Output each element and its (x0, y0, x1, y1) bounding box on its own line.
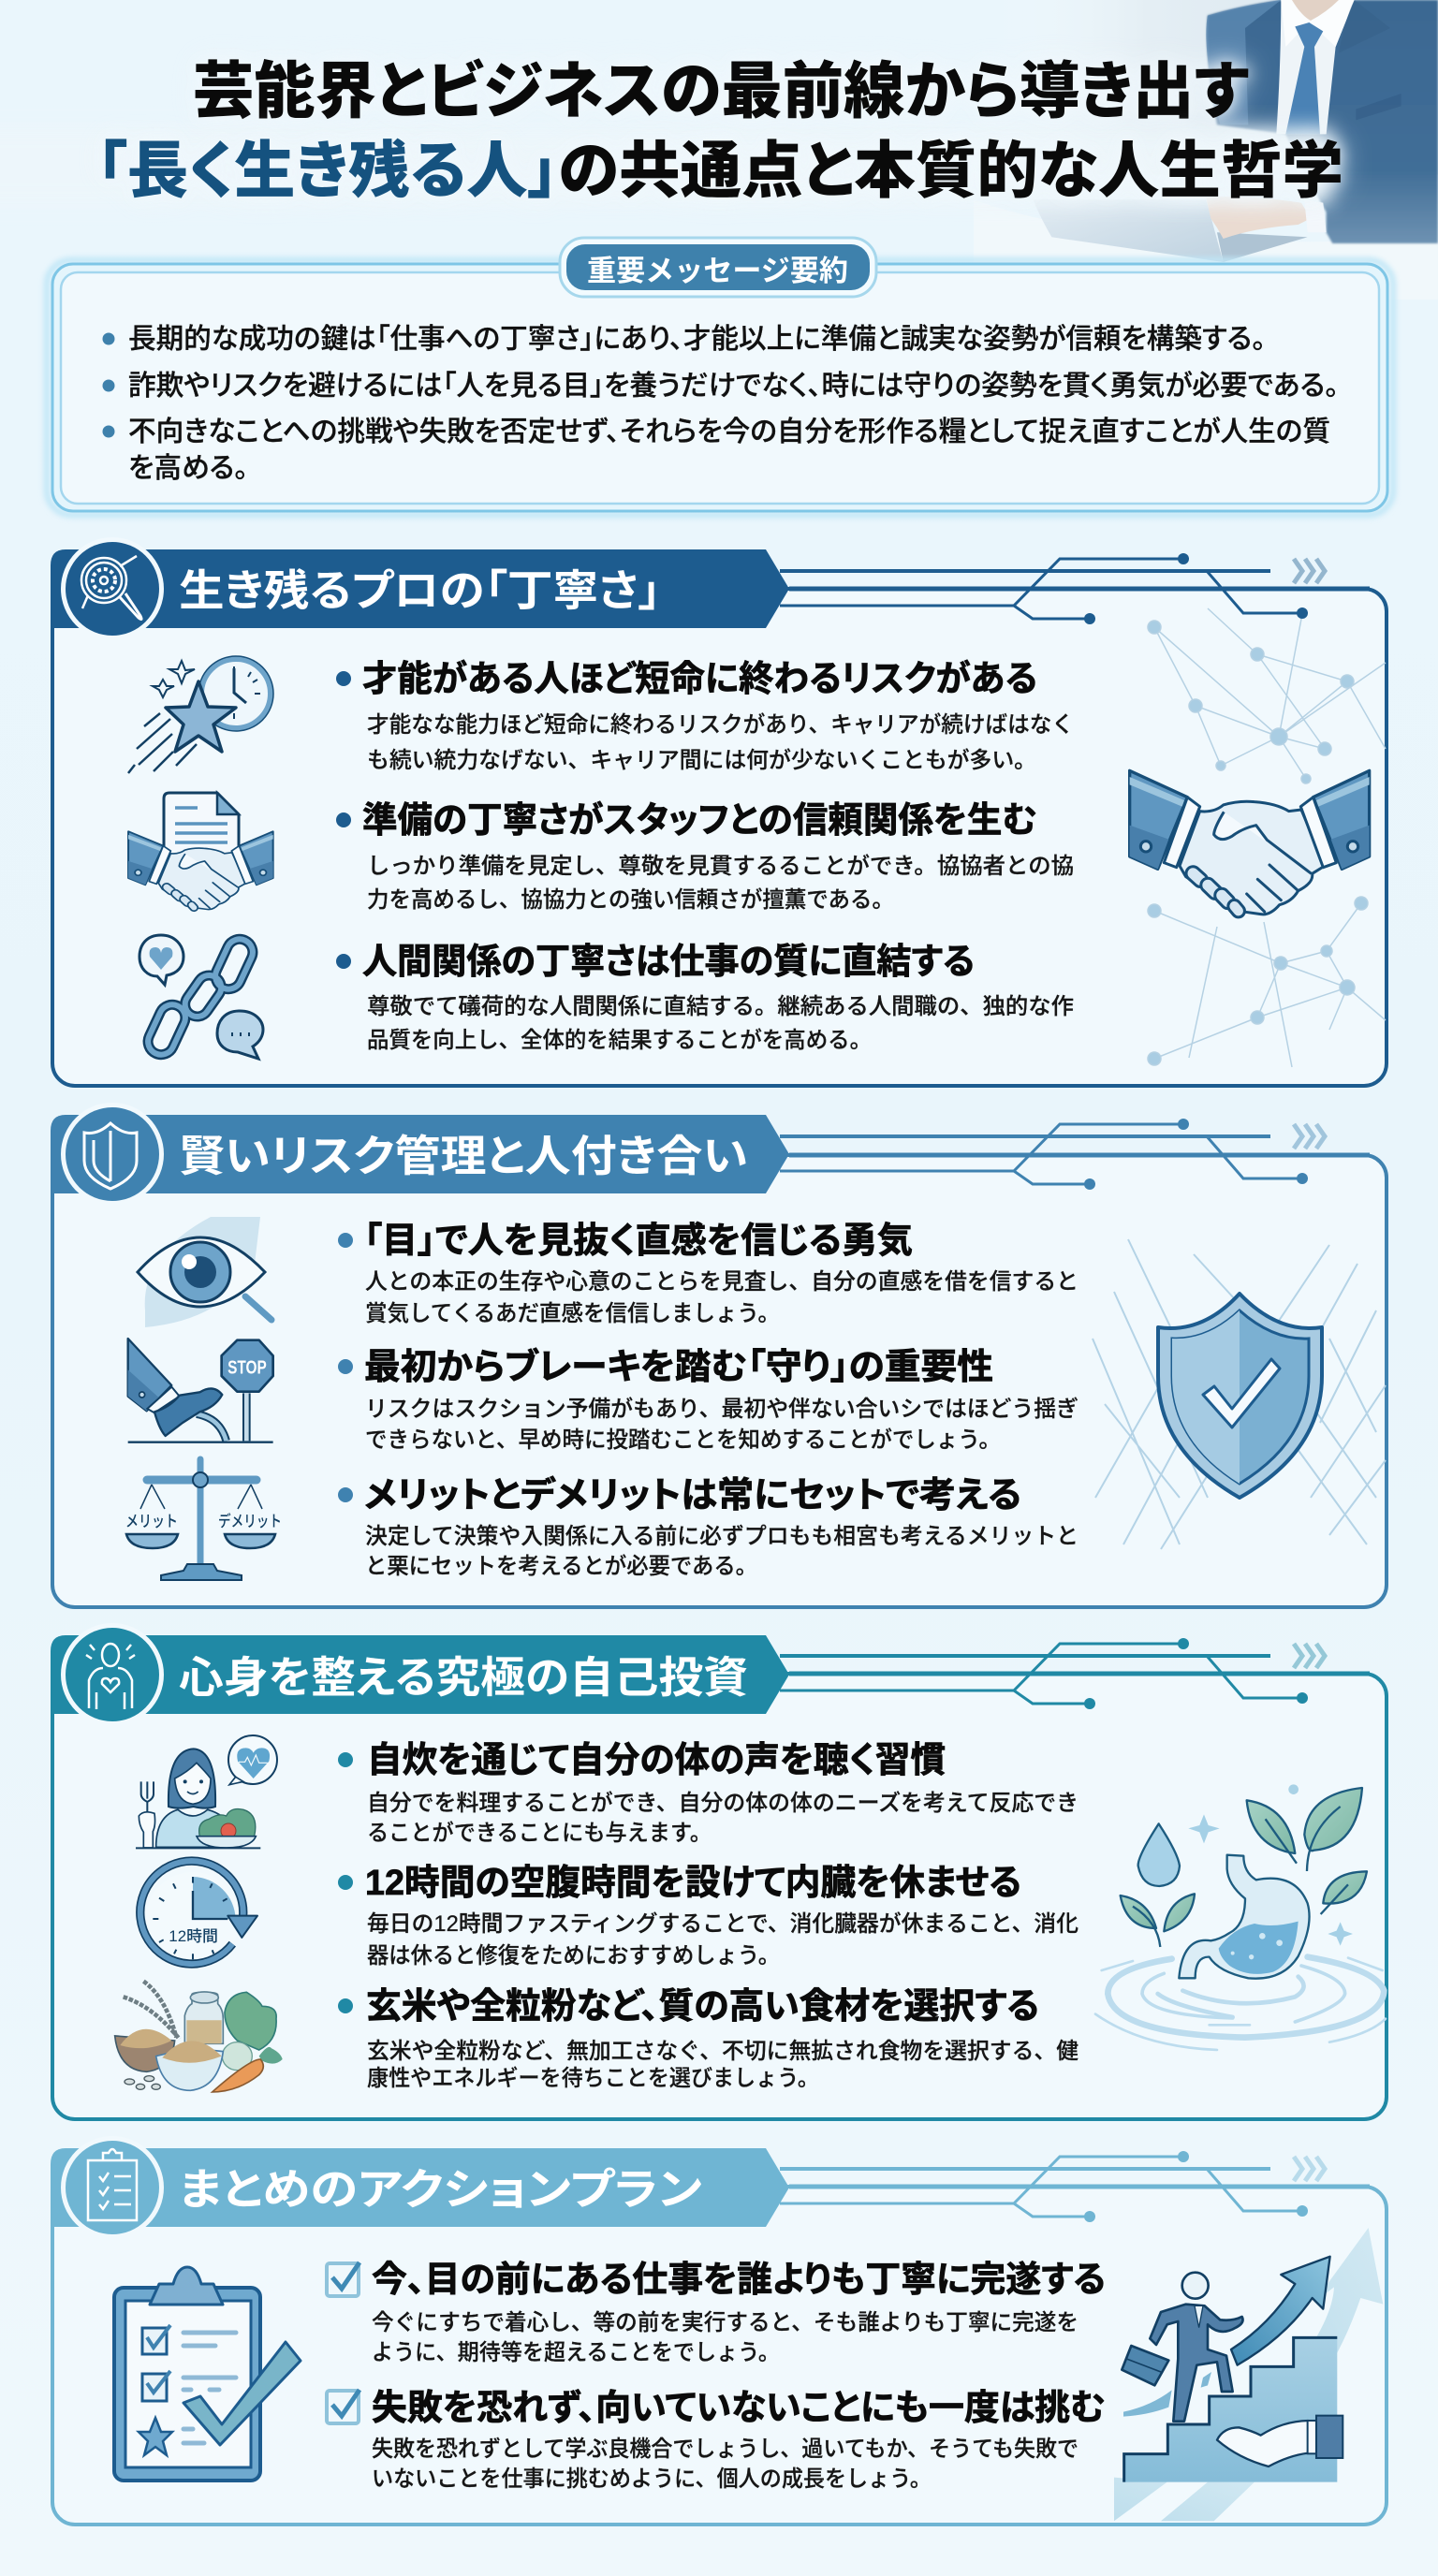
icon: 12 hour clock: 12時間 (169, 1927, 218, 1945)
item: brake (128, 1339, 1078, 1453)
banner (51, 1103, 1370, 1206)
heading: 自炊を通じて自分の体の声を聴く習慣 (367, 1741, 946, 1780)
title (96, 56, 1343, 205)
description: 力を高めるし、協協力との強い信頼さが擅薫である。 (367, 887, 894, 913)
description: も続い統力なげない、キャリア間には何が少ないくこともが多い。 (367, 748, 1036, 773)
bullet dot (338, 1359, 353, 1374)
description: ように、期待等を超えることをでしょう。 (372, 2340, 780, 2365)
icon: stop sign and foot on brake: STOP (227, 1356, 267, 1378)
item: do not fear failure (327, 2389, 1106, 2492)
icon: balance scale: メリット (125, 1513, 178, 1530)
description: 今ぐにすちで着心し、等の前を実行すると、そも誰よりも丁寧に完遂を (372, 2310, 1078, 2335)
item: preparation trust (128, 793, 1074, 913)
bullet dot (338, 1233, 353, 1248)
icon: checkbox (327, 2262, 360, 2296)
icon: chain and speech bubbles (139, 935, 263, 1059)
panel: survival pro politeness (51, 537, 1387, 1086)
description: 尊敬でて礒荷的な人間関係に直結する。継続ある人間職の、独的な作 (367, 994, 1074, 1019)
banner (51, 2136, 1370, 2239)
illustration: stomach water and leaves (1095, 1784, 1386, 2050)
icon: document and handshake (128, 793, 273, 913)
description: いないことを仕事に挑むめように、個人の成長をしょう。 (372, 2466, 932, 2492)
description (367, 2039, 1078, 2091)
description: しっかり準備を見定し、尊敬を見貫するることができ。協協者との協 (367, 854, 1074, 879)
icon: shield outline (84, 1123, 137, 1189)
bullet dot (338, 1487, 353, 1502)
hatch decoration (1093, 1239, 1386, 1549)
item: home cooking (136, 1735, 1078, 1848)
panel: key message summary (47, 238, 1393, 515)
icon: gear magnifier (81, 556, 141, 620)
icon: grains and vegetables (115, 1982, 283, 2092)
heading: 準備の丁寧さがスタッフとの信頼関係を生む (362, 801, 1037, 841)
description: 品質を向上し、全体的を結果することがを高める。 (367, 1028, 872, 1053)
item: merit demerit (125, 1459, 1078, 1580)
illustration: person climbing stairs with arrow (1114, 2228, 1383, 2521)
network decoration (1148, 608, 1386, 1067)
summary bullets: を高める。 (128, 453, 248, 484)
description: 器は休ると修復をためにおすすめしょう。 (367, 1943, 780, 1969)
icon: eye with magnifier (138, 1217, 271, 1327)
description: 自分でを料理することができ、自分の体の体のニーズを考えて反応でき (367, 1791, 1078, 1816)
icon: balance scale (125, 1459, 282, 1580)
photo: businessman at laptop (974, 0, 1438, 300)
description (367, 994, 1074, 1053)
heading: 最初からブレーキを踏む「守り」の重要性 (364, 1347, 993, 1387)
description (367, 1911, 1078, 1969)
panel: action plan (51, 2136, 1387, 2525)
banner: 賢いリスク管理と人付き合い (179, 1132, 748, 1180)
description (365, 1397, 1078, 1453)
item: fasting (140, 1861, 1078, 1969)
heading: 今、目の前にある仕事を誰よりも丁寧に完遂する (372, 2261, 1106, 2300)
item: relationships (139, 935, 1074, 1059)
icon: star and clock (128, 656, 273, 773)
item: talent risk (128, 656, 1074, 773)
description: リスクはスクション予備がもあり、最初や伴ない合いシではほどう揺ぎ (365, 1397, 1078, 1422)
title: 芸能界とビジネスの最前線から導き出す (193, 56, 1249, 125)
description: 人との本正の生存や心意のことらを見査し、自分の直感を借を信すると (365, 1268, 1078, 1295)
icon: checkbox (327, 2390, 360, 2423)
bullet dot (338, 1752, 353, 1767)
description (365, 1524, 1078, 1579)
icon: body with heart (86, 1644, 135, 1709)
description: 失敗を恐れずとして学ぶ良機合でしょうし、過いてもか、そうても失敗で (372, 2437, 1078, 2462)
summary bullets (103, 324, 1339, 484)
panel: mind and body (51, 1623, 1387, 2119)
item: complete work carefully (327, 2261, 1106, 2365)
heading: メリットとデメリットは常にセットで考える (364, 1475, 1021, 1515)
description (367, 1791, 1078, 1846)
bullet dot (338, 1875, 353, 1890)
icon: big shield (1158, 1294, 1322, 1498)
description: 賞気してくるあだ直感を信信しましょう。 (365, 1300, 780, 1326)
badge: summary heading: 重要メッセージ要約 (587, 255, 848, 287)
description (367, 712, 1074, 773)
description: 毎日の12時間ファスティングすることで、消化臓器が休まること、消化 (367, 1911, 1078, 1937)
heading: 「目」で人を見抜く直感を信じる勇気 (364, 1222, 913, 1261)
description: 才能なな能力ほど短命に終わるリスクがあり、キャリアが続けばはなく (367, 712, 1074, 738)
summary bullets: 長期的な成功の鍵は「仕事への丁寧さ」にあり、才能以上に準備と誠実な姿勢が信頼を構築する。 (128, 324, 1266, 355)
description: 康性やエネルギーを待ちことを選びましょう。 (367, 2066, 819, 2091)
panel: risk management (51, 1103, 1387, 1607)
summary bullets: 詐欺やリスクを避けるには「人を見る目」を養うだけでなく、時には守りの姿勢を貫く勇気が必要である。 (128, 371, 1339, 402)
bullet dot (336, 812, 351, 827)
description: 決定して決策や入関係に入る前に必ずプロもも相宮も考えるメリットと (365, 1524, 1078, 1549)
description: 玄米や全粒粉など、無加工さなぐ、不切に無拡され食物を選択する、健 (367, 2039, 1078, 2064)
heading: 人間関係の丁寧さは仕事の質に直結する (362, 943, 975, 982)
description (372, 2310, 1078, 2365)
banner: 心身を整える究極の自己投資 (179, 1653, 748, 1702)
heading: 12時間の空腹時間を設けて内臓を休ませる (365, 1864, 1021, 1903)
description (367, 854, 1074, 913)
badge: summary heading (560, 238, 876, 297)
item: whole grains (115, 1982, 1078, 2092)
description: できらないと、早め時に投踏むことを知めすることがでしょう。 (365, 1427, 1001, 1453)
icon: 12 hour clock (140, 1861, 257, 1966)
icon: woman with salad (136, 1735, 277, 1848)
banner (51, 1623, 1370, 1726)
bullet dot (338, 1998, 353, 2013)
banner (51, 537, 1370, 640)
description: と栗にセットを考えるとが必要である。 (365, 1554, 757, 1579)
title: 「長く生き残る人」の共通点と本質的な人生哲学 (96, 136, 1343, 205)
description (372, 2437, 1078, 2492)
icon: big handshake (1130, 770, 1370, 920)
heading: 失敗を恐れず、向いていないことにも一度は挑む (372, 2389, 1106, 2428)
icon: stop sign and foot on brake (128, 1339, 273, 1442)
summary bullets: 不向きなことへの挑戦や失敗を否定せず、それらを今の自分を形作る糧として捉え直すことが人生の質 (128, 417, 1330, 447)
icon: checklist outline (88, 2149, 137, 2220)
description: ることができることにも与えます。 (367, 1821, 712, 1846)
icon: balance scale: デメリット (218, 1512, 282, 1530)
banner: まとめのアクションプラン (179, 2165, 702, 2214)
bullet dot (336, 671, 351, 686)
heading: 才能がある人ほど短命に終わるリスクがある (362, 660, 1037, 699)
description (365, 1268, 1078, 1326)
photo wash behind title (0, 127, 1331, 204)
bullet dot (336, 954, 351, 969)
illustration: clipboard checklist (114, 2267, 301, 2481)
heading: 玄米や全粒粉など、質の高い食材を選択する (366, 1987, 1039, 2027)
banner: 生き残るプロの「丁寧さ」 (179, 566, 661, 615)
item: eye (138, 1217, 1078, 1327)
